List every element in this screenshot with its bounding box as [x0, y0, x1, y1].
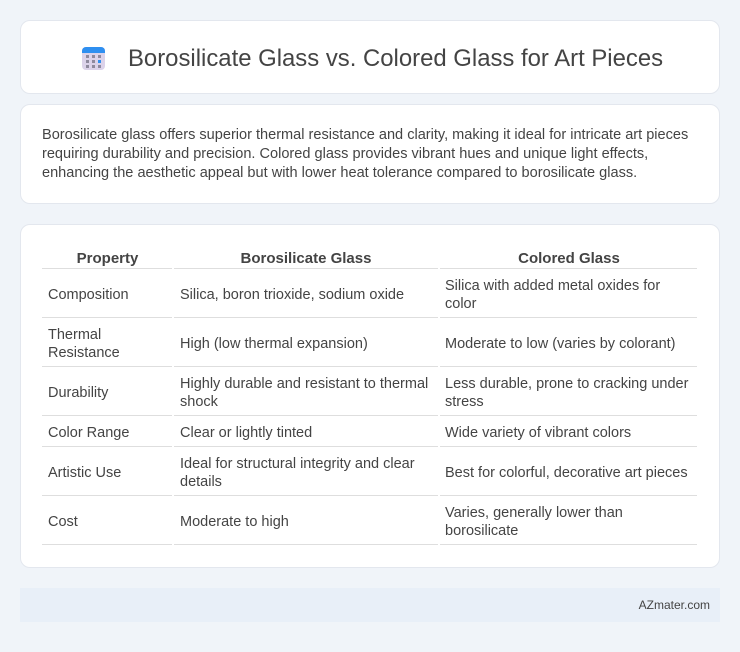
- table header: colored glass: Colored Glass: [518, 250, 620, 267]
- row: thermal resistance: Resistance: [48, 345, 120, 361]
- durability: borosilicate: Highly durable and resistant to thermal: [180, 376, 428, 392]
- cost: borosilicate: Moderate to high: [180, 514, 289, 530]
- row: durability: Durability: [48, 385, 108, 401]
- composition: borosilicate: Silica, boron trioxide, sodium oxide: [180, 287, 404, 303]
- footer bar: [20, 588, 720, 622]
- durability: colored: stress: [445, 394, 484, 410]
- artistic use: borosilicate: details: [180, 474, 222, 490]
- table header: borosilicate glass: Borosilicate Glass: [241, 250, 371, 267]
- header panel: [20, 20, 720, 94]
- artistic use: borosilicate: [180, 456, 415, 490]
- row: artistic use: Artistic Use: [48, 465, 121, 481]
- thermal resistance: colored: Moderate to low (varies by colorant): [445, 336, 676, 352]
- panel: comparison table: [20, 224, 720, 568]
- row: composition: Composition: [48, 287, 129, 303]
- cost: colored: [445, 505, 623, 539]
- intro text: Borosilicate glass offers superior thermal resistance and clarity, making it ideal for intricate art pieces: [42, 127, 688, 143]
- row: thermal resistance: [48, 327, 120, 361]
- title: Borosilicate Glass vs. Colored Glass for Art Pieces: [128, 45, 663, 72]
- row: thermal resistance: Thermal: [48, 327, 101, 343]
- intro text: [42, 127, 688, 181]
- intro text: requiring durability and precision. Colored glass provides vibrant hues and unique light effects,: [42, 146, 648, 162]
- durability: colored: [445, 376, 688, 410]
- color range: colored: Wide variety of vibrant colors: [445, 425, 631, 441]
- footer credit: AZmater.com: [639, 598, 710, 612]
- durability: borosilicate: shock: [180, 394, 218, 410]
- color range: borosilicate: Clear or lightly tinted: [180, 425, 312, 441]
- artistic use: colored: Best for colorful, decorative art pieces: [445, 465, 688, 481]
- durability: borosilicate: [180, 376, 428, 410]
- cost: colored: borosilicate: [445, 523, 518, 539]
- intro text: enhancing the aesthetic appeal but with lower heat tolerance compared to borosilicate glass.: [42, 165, 637, 181]
- icon: calendar: [82, 47, 105, 70]
- composition: colored: Silica with added metal oxides for: [445, 278, 660, 294]
- artistic use: borosilicate: Ideal for structural integrity and clear: [180, 456, 415, 472]
- thermal resistance: borosilicate: High (low thermal expansion): [180, 336, 368, 352]
- composition: colored: color: [445, 296, 476, 312]
- row: cost: Cost: [48, 514, 78, 530]
- row: color range: Color Range: [48, 425, 129, 441]
- intro panel: [20, 104, 720, 204]
- durability: colored: Less durable, prone to cracking under: [445, 376, 688, 392]
- composition: colored: [445, 278, 660, 312]
- cost: colored: Varies, generally lower than: [445, 505, 623, 521]
- table header: property: Property: [77, 250, 138, 267]
